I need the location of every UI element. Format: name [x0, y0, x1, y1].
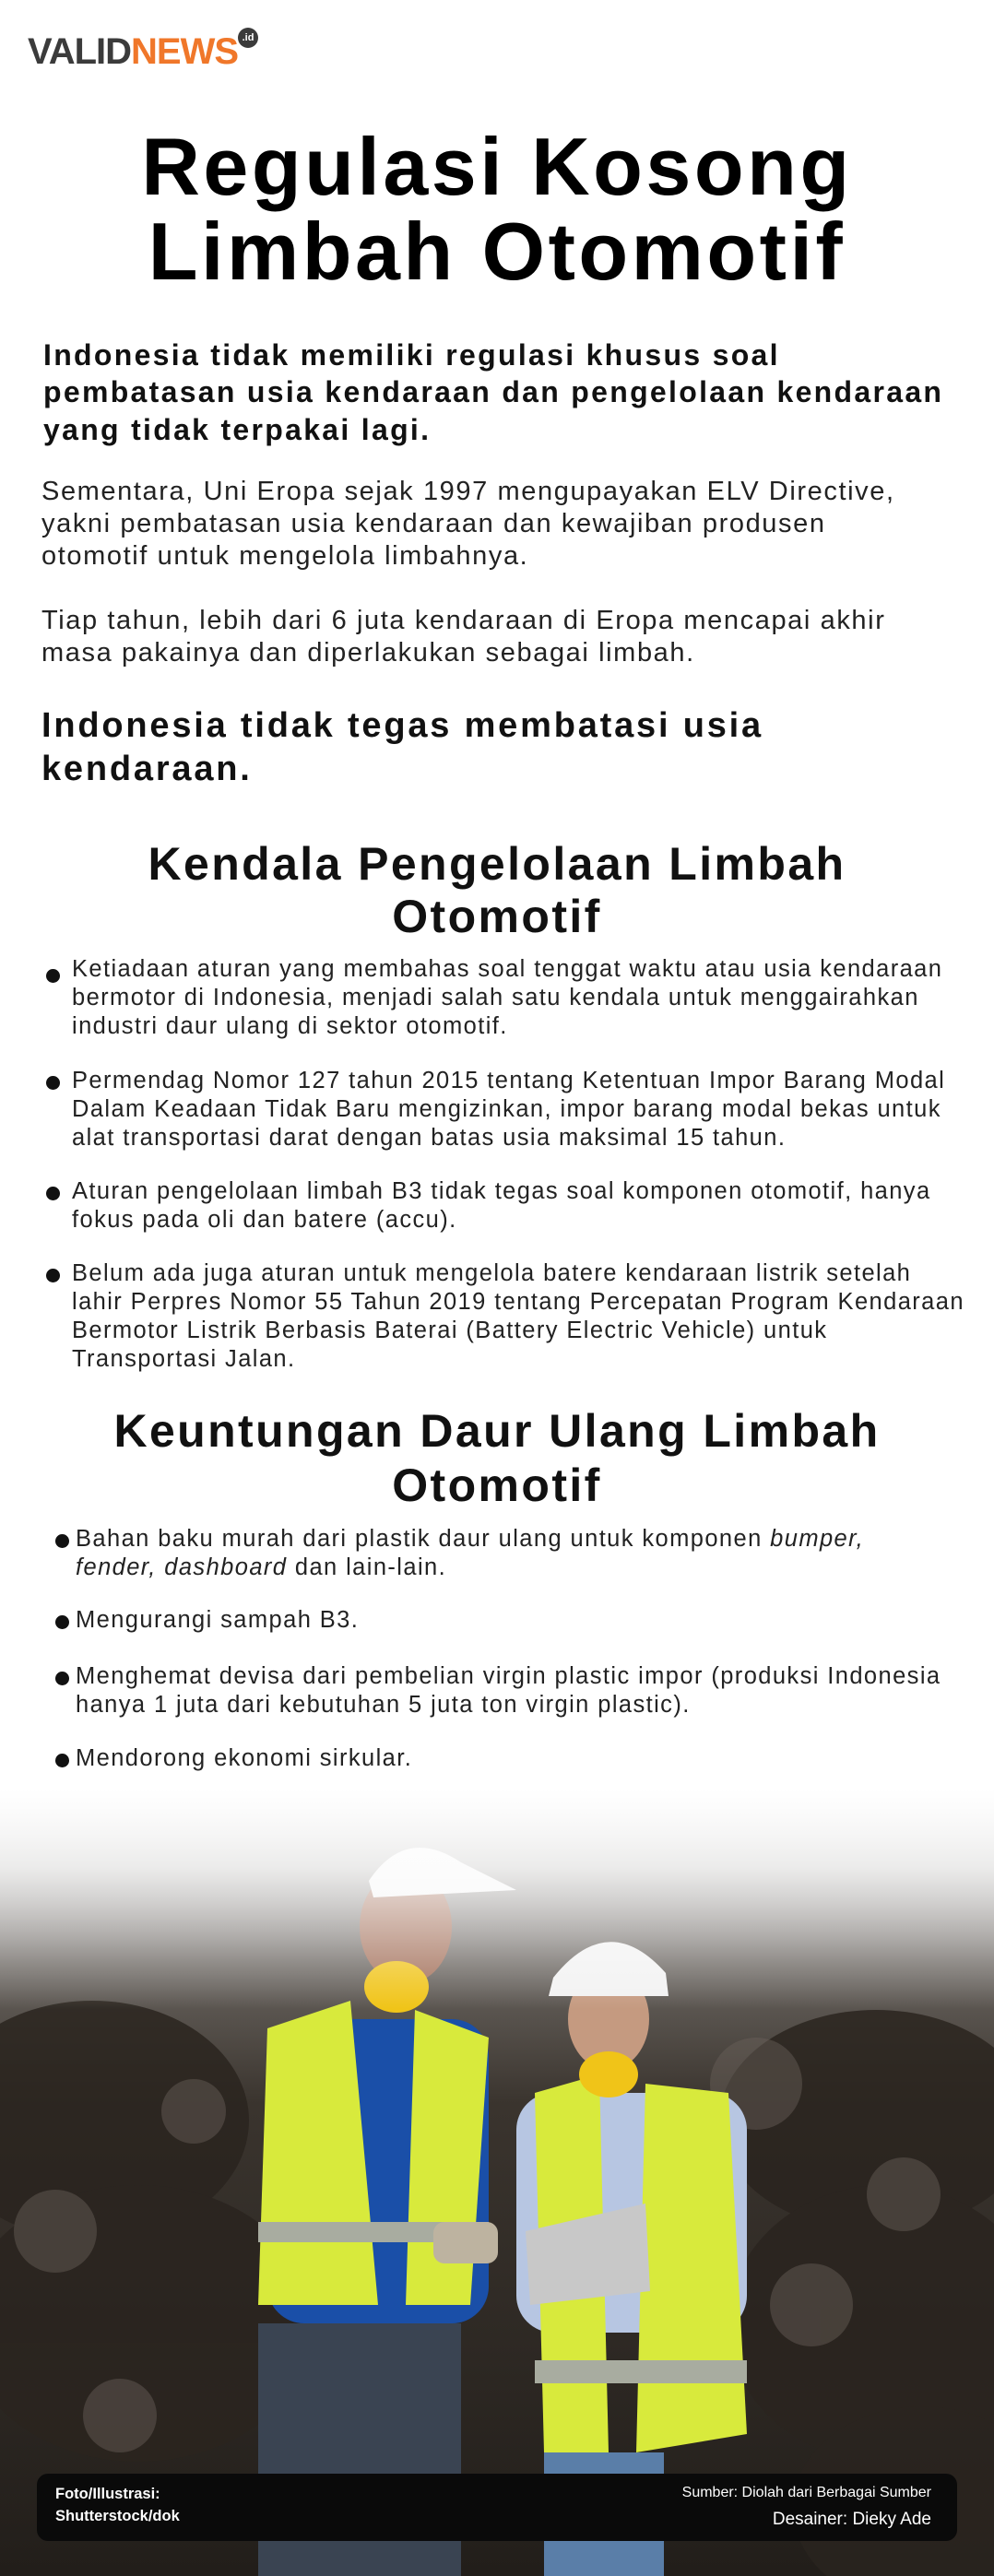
bullet 1: Bahan baku murah dari plastik daur ulang untuk komponen bumper, [76, 1526, 864, 1552]
paragraph: EU ELV: yakni pembatasan usia kendaraan dan kewajiban produsen [41, 509, 826, 538]
bullet 3: hanya 1 juta dari kebutuhan 5 juta ton virgin plastic). [76, 1692, 691, 1718]
credit: photo: Shutterstock/dok [55, 2508, 180, 2524]
bullet 3: Menghemat devisa dari pembelian virgin plastic impor (produksi Indonesia [76, 1663, 941, 1689]
section heading: keuntungan: Keuntungan Daur Ulang Limbah [113, 1405, 881, 1457]
bullet 4: Bermotor Listrik Berbasis Baterai (Battery Electric Vehicle) untuk [72, 1318, 827, 1343]
bullet 4: Mendorong ekonomi sirkular. [76, 1745, 412, 1771]
subheading: Indonesia tidak tegas membatasi usia [41, 706, 763, 745]
bullet 1: industri daur ulang di sektor otomotif. [72, 1013, 508, 1039]
bullet 2: alat transportasi darat dengan batas usia maksimal 15 tahun. [72, 1125, 786, 1151]
paragraph: 6 juta [41, 606, 885, 668]
bullet 1 [46, 956, 942, 1039]
list: keuntungan [55, 1526, 941, 1771]
woman [516, 2093, 747, 2333]
section heading: kendala: Kendala Pengelolaan Limbah [148, 838, 846, 890]
credit: source and designer [682, 2485, 931, 2529]
bullet 2: Permendag Nomor 127 tahun 2015 tentang Ketentuan Impor Barang Modal [72, 1068, 945, 1093]
paragraph: EU ELV: otomotif untuk mengelola limbahnya. [41, 541, 528, 571]
bullet 3: Aturan pengelolaan limbah B3 tidak tegas soal komponen otomotif, hanya [72, 1178, 931, 1204]
bullet 4: lahir Perpres Nomor 55 Tahun 2019 tentang Percepatan Program Kendaraan [72, 1289, 964, 1315]
bullet 2: Dalam Keadaan Tidak Baru mengizinkan, impor barang modal bekas untuk [72, 1096, 941, 1122]
section heading: kendala [148, 838, 846, 942]
photo: workers in scrapyard [0, 1829, 994, 2576]
intro bold text: pembatasan usia kendaraan dan pengelolaan kendaraan [43, 375, 943, 408]
bullet 1: Ketiadaan aturan yang membahas soal tenggat waktu atau usia kendaraan [72, 956, 942, 982]
intro bold text: Indonesia tidak memiliki regulasi khusus soal [43, 338, 780, 372]
paragraph: EU ELV: Sementara, Uni Eropa sejak 1997 mengupayakan ELV Directive, [41, 477, 895, 506]
subheading [41, 706, 763, 788]
bullet 1: fender, dashboard dan lain-lain. [76, 1554, 446, 1580]
paragraph: EU ELV [41, 477, 895, 571]
paragraph: 6 juta: masa pakainya dan diperlakukan sebagai limbah. [41, 638, 695, 668]
bullet 2 [46, 1068, 945, 1151]
bullet 3 [46, 1178, 931, 1233]
credit: photo [55, 2486, 180, 2524]
bullet 4: Belum ada juga aturan untuk mengelola batere kendaraan listrik setelah [72, 1260, 911, 1286]
bullet 2: Mengurangi sampah B3. [76, 1607, 359, 1633]
credit: source and designer: Sumber: Diolah dari Berbagai Sumber [682, 2485, 931, 2500]
section heading: keuntungan [113, 1405, 881, 1511]
logo: .id [243, 32, 254, 43]
list: kendala [46, 956, 964, 1372]
bullet 4: Transportasi Jalan. [72, 1346, 296, 1372]
section heading: kendala: Otomotif [392, 891, 602, 942]
bullet 1 [55, 1526, 864, 1580]
intro bold text [43, 338, 943, 446]
footer credits bar [37, 2474, 957, 2541]
section heading: keuntungan: Otomotif [392, 1459, 602, 1511]
logo: VALIDNEWS [28, 31, 238, 72]
intro bold text: yang tidak terpakai lagi. [43, 413, 431, 446]
title: Limbah Otomotif [148, 206, 846, 297]
title [141, 121, 853, 297]
man [267, 2019, 489, 2323]
bullet 1: bermotor di Indonesia, menjadi salah satu kendala untuk menggairahkan [72, 985, 919, 1010]
bullet 4 [46, 1260, 964, 1372]
credit: source and designer: Desainer: Dieky Ade [773, 2510, 931, 2529]
subheading: kendaraan. [41, 750, 253, 788]
title: Regulasi Kosong [141, 121, 853, 212]
credit: photo: Foto/Illustrasi: [55, 2486, 160, 2502]
bullet 3 [55, 1663, 941, 1718]
paragraph: 6 juta: Tiap tahun, lebih dari 6 juta kendaraan di Eropa mencapai akhir [41, 606, 885, 635]
bullet 3: fokus pada oli dan batere (accu). [72, 1207, 457, 1233]
